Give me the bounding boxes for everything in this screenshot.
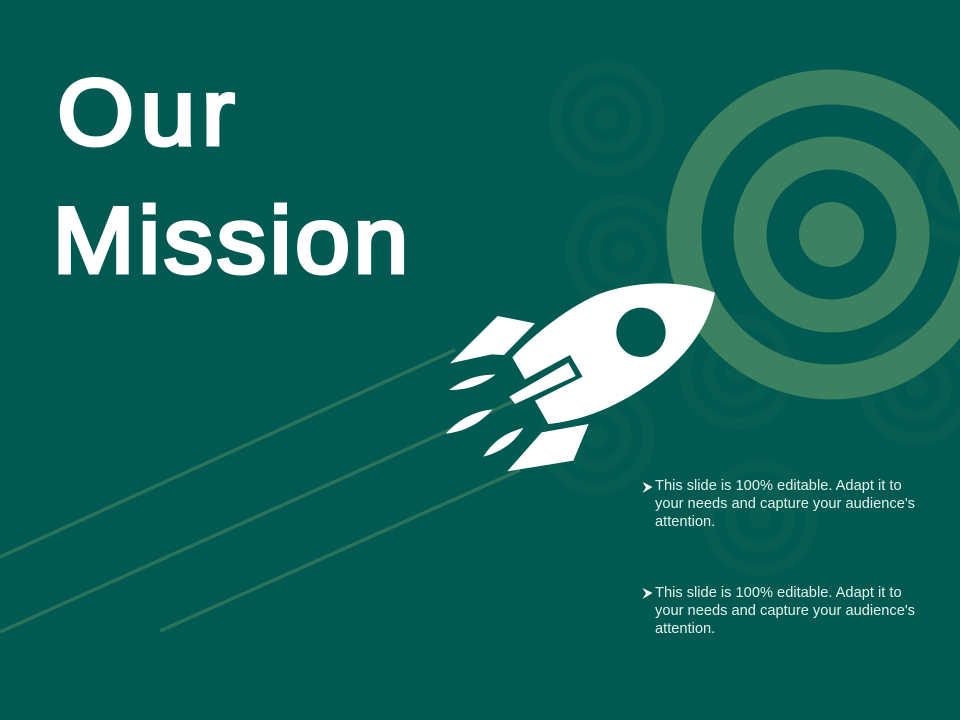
- title: Mission: [52, 189, 408, 293]
- lower fin: [507, 424, 589, 471]
- rocket body: [512, 283, 715, 424]
- text block: first bullet: This slide is 100% editable. Adapt it to: [655, 478, 902, 494]
- icon: rocket: [446, 283, 715, 471]
- text block: second bullet: your needs and capture your audience's: [655, 603, 915, 619]
- upper fin: [450, 316, 535, 363]
- text block: first bullet: [655, 478, 915, 530]
- flame three: [483, 428, 523, 457]
- exhaust tube: [509, 363, 576, 404]
- icon: second bullet arrow: [642, 588, 652, 599]
- icon: first bullet arrow: [642, 482, 652, 493]
- text block: first bullet: attention.: [655, 514, 715, 530]
- title: [52, 61, 408, 293]
- title: Our: [57, 61, 235, 165]
- faint background targets: [545, 67, 960, 570]
- text block: second bullet: attention.: [655, 621, 715, 637]
- rocket speed trails: [0, 350, 520, 632]
- flame two: [446, 409, 493, 434]
- text block: second bullet: This slide is 100% editable. Adapt it to: [655, 585, 902, 601]
- text block: first bullet: your needs and capture your audience's: [655, 496, 915, 512]
- text block: second bullet: [655, 585, 915, 637]
- large target: [684, 87, 960, 382]
- flame one: [449, 375, 496, 390]
